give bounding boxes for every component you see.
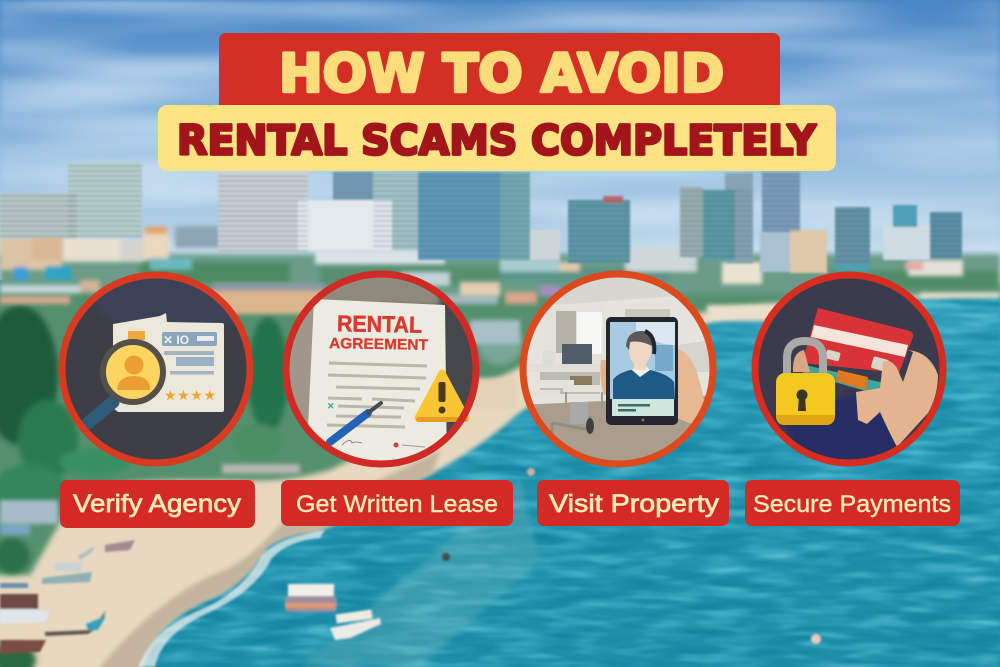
- label: Secure Payments: Secure Payments: [753, 491, 951, 518]
- room interior: [534, 278, 710, 460]
- title banner: How to avoid: HOW TO AVOID: [279, 44, 724, 104]
- magnifying glass: [88, 342, 163, 423]
- hand holding card: [793, 350, 938, 447]
- rental agreement paper: ✕: [327, 401, 335, 411]
- rental agreement paper: RENTAL: [337, 310, 422, 338]
- warning triangle: [416, 373, 468, 422]
- title banner: How to avoid: [219, 33, 780, 113]
- step 3 badge: visit property icon: [520, 270, 720, 470]
- sea: [0, 285, 1000, 667]
- label: Verify Agency: [60, 480, 255, 528]
- label: Get Written Lease: [281, 480, 513, 526]
- step 4 badge: secure payments icon: [755, 275, 943, 470]
- skyline buildings: [0, 162, 962, 273]
- label: Secure Payments: [745, 480, 960, 526]
- credit card: [802, 308, 913, 398]
- rental agreement paper: AGREEMENT: [329, 335, 428, 354]
- green hillside and shoreline town: [0, 285, 1000, 667]
- label: Get Written Lease: Get Written Lease: [296, 491, 498, 518]
- boats and shore details: [0, 468, 821, 654]
- mid-ground town and tree line: [0, 226, 1000, 321]
- sky: [0, 0, 1000, 280]
- hands holding tablet: [600, 348, 704, 425]
- tablet video call: [606, 317, 678, 425]
- subtitle banner: Rental scams completely: RENTAL SCAMS COMPLETELY: [177, 116, 817, 164]
- step 1 badge: verify agency icon: [62, 266, 255, 463]
- step 2 badge: written lease icon: [270, 262, 476, 470]
- blue pen: [330, 403, 381, 442]
- sand beach: [0, 270, 1000, 667]
- padlock: [776, 341, 835, 425]
- agency profile card: ✕ IO: [163, 333, 189, 347]
- label: Verify Agency: Verify Agency: [73, 490, 242, 518]
- label: Visit Property: [537, 480, 729, 526]
- label: Visit Property: Visit Property: [549, 490, 720, 518]
- agency profile card: [113, 313, 224, 412]
- agency profile card: ★★★★: [164, 387, 216, 403]
- rental agreement paper: [306, 299, 447, 470]
